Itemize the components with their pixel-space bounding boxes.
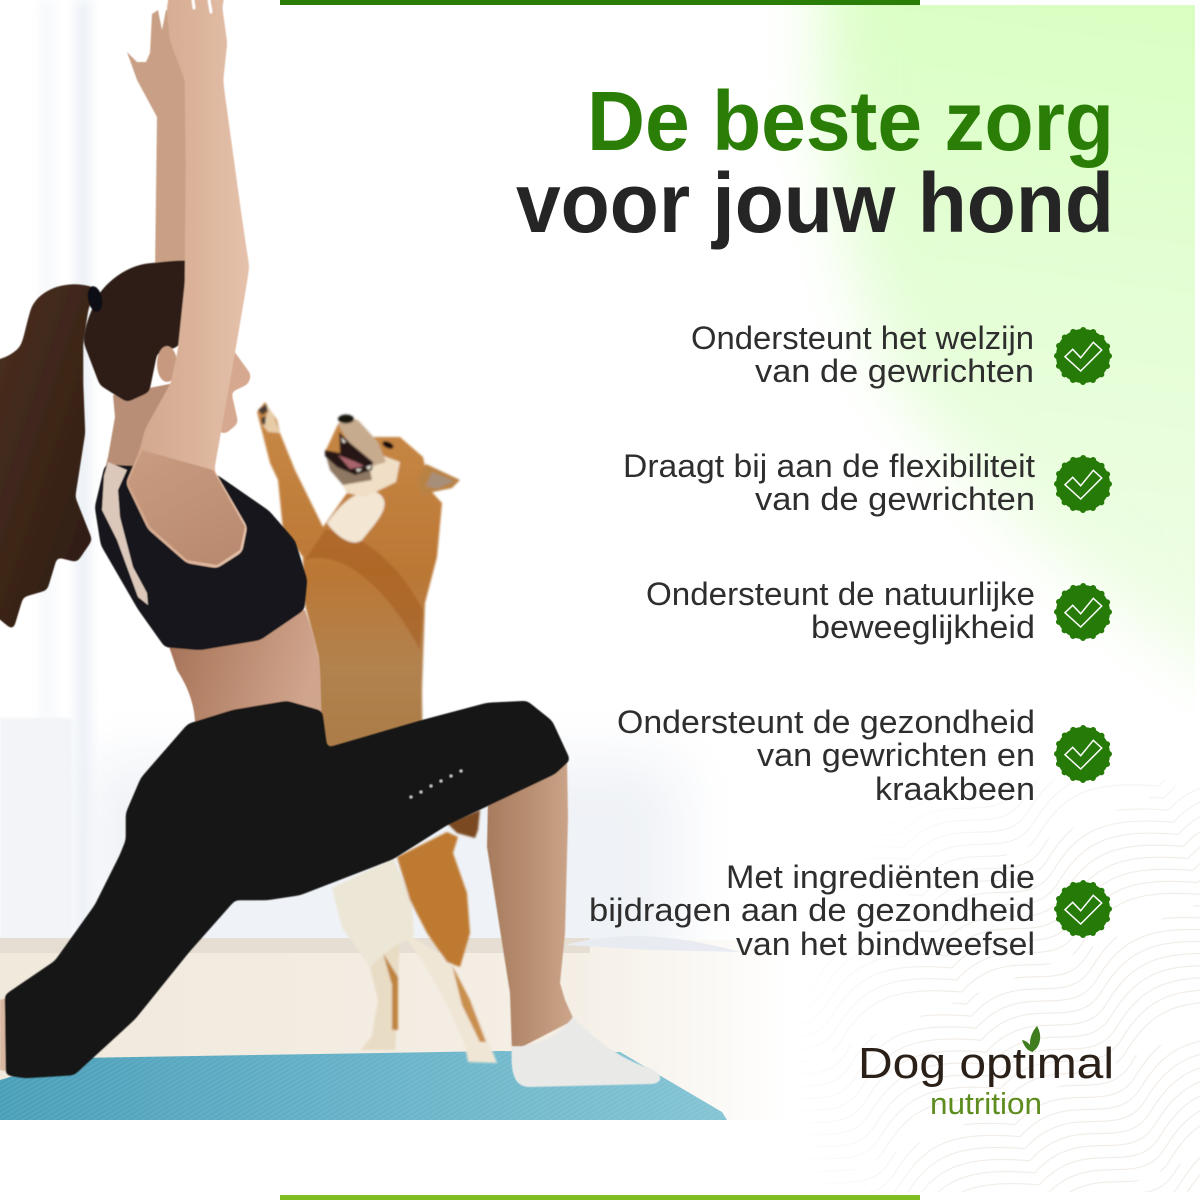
dog muzzle (338, 417, 386, 466)
woman (0, 0, 660, 1087)
benefit 1 text (691, 320, 1034, 389)
dog white chest (327, 490, 385, 542)
dog lower jaw (325, 452, 372, 485)
bra back cutout (102, 462, 148, 605)
dog paw light (262, 403, 280, 433)
benefit 4 badge icon (1056, 727, 1110, 781)
benefit 4 text: van gewrichten en (757, 737, 1035, 773)
dog right leg orange stripe (452, 965, 486, 1042)
dog teeth (341, 437, 372, 472)
benefit 1 text: Ondersteunt het welzijn (691, 320, 1034, 356)
yoga mat (0, 1051, 727, 1120)
benefit 1 text: van de gewrichten (755, 353, 1034, 389)
benefit 3 text: Ondersteunt de natuurlijke (646, 576, 1035, 612)
dog ear (417, 464, 460, 497)
dog (257, 402, 497, 1063)
torso (160, 610, 322, 730)
dog tail tip (447, 810, 480, 838)
benefit 2 text (623, 448, 1035, 517)
benefit 5 text (589, 859, 1035, 962)
title line 2: voor jouw hond (516, 156, 1114, 250)
benefit 4 text: Ondersteunt de gezondheid (617, 704, 1035, 740)
benefit 4 text: kraakbeen (875, 771, 1035, 807)
benefit 5 text: van het bindweefsel (736, 926, 1035, 962)
rear knee skin (0, 997, 10, 1072)
top green bar (280, 0, 920, 5)
dog orange haunch (397, 832, 470, 967)
logo leaves (1022, 1026, 1040, 1052)
benefit 3 badge icon (1056, 585, 1110, 639)
benefit 5 text: bijdragen aan de gezondheid (589, 892, 1035, 928)
hair tie (85, 285, 105, 313)
dog tongue (338, 455, 364, 469)
benefit 5 badge icon (1056, 882, 1110, 936)
benefit 3 text (646, 576, 1035, 645)
logo wordmark: Dog optimal (858, 1039, 1114, 1088)
reflective dots (410, 770, 462, 798)
title (516, 74, 1114, 250)
benefit 5 text: Met ingrediënten die (726, 859, 1035, 895)
lower leg (487, 760, 574, 1052)
ear (157, 346, 177, 382)
logo (858, 1026, 1114, 1121)
benefit 1 badge icon (1056, 329, 1110, 383)
benefit 2 text: Draagt bij aan de flexibiliteit (623, 448, 1035, 484)
logo subline: nutrition (930, 1086, 1042, 1121)
benefit 2 text: van de gewrichten (755, 481, 1035, 517)
shoulder shading (128, 450, 245, 565)
dog chest shading (305, 530, 423, 650)
benefit 3 text: beweeglijkheid (811, 609, 1035, 645)
dog eye (381, 440, 395, 450)
dog mouth (325, 432, 373, 475)
hair bun (84, 261, 192, 402)
face profile (205, 335, 251, 434)
ponytail (0, 284, 95, 630)
front arm and hand (126, 0, 249, 568)
dog inner ear (426, 472, 454, 489)
back arm and hand (127, 10, 188, 270)
dog hind leg tendon (383, 953, 398, 1030)
bottom green bar (280, 1195, 920, 1200)
dog torso and foreleg (257, 402, 442, 780)
finger gaps (193, 0, 211, 12)
dog nose (338, 414, 354, 424)
dog white belly (332, 858, 414, 967)
dog left hind leg (342, 927, 400, 1050)
dog cheek (343, 452, 400, 497)
dog paw pads (258, 404, 268, 425)
sports bra (95, 465, 307, 650)
benefit 2 badge icon (1056, 457, 1110, 511)
leggings (5, 701, 570, 1078)
title line 1: De beste zorg (587, 74, 1114, 168)
benefit 4 text (617, 704, 1035, 807)
neck and upper back (103, 380, 190, 490)
sock (512, 1017, 660, 1087)
dog right hind leg (400, 930, 497, 1063)
